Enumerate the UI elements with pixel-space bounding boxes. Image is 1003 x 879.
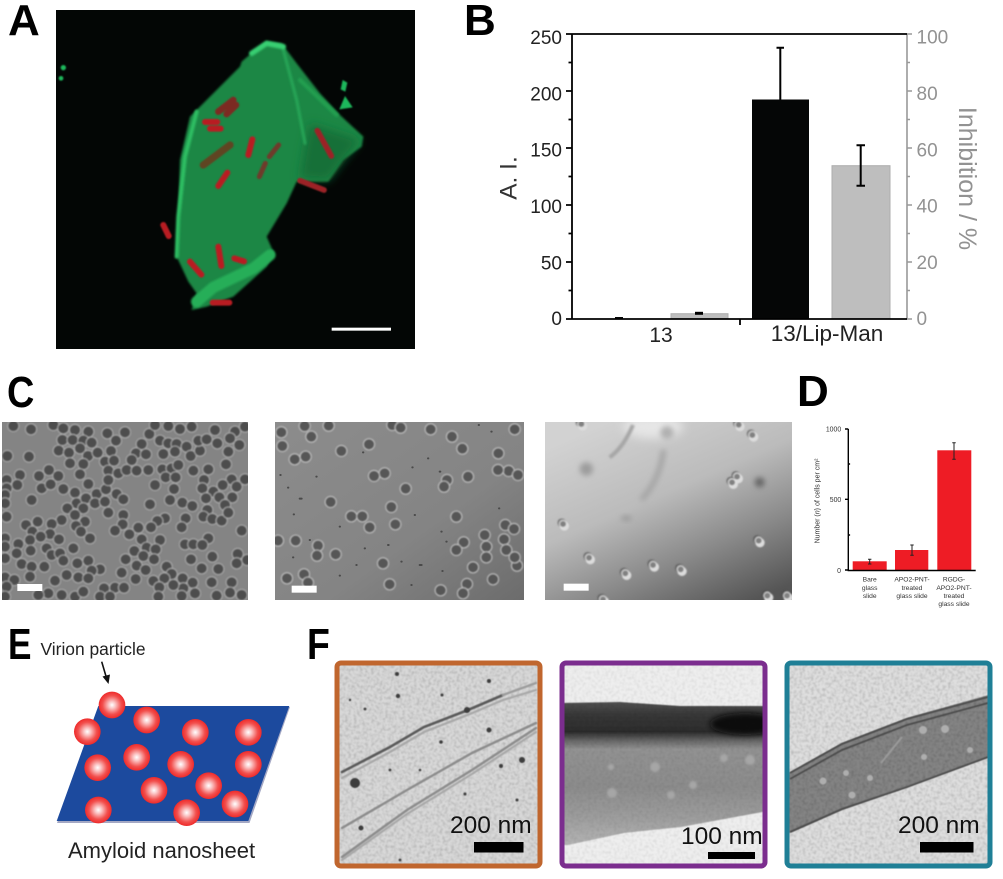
debris specks <box>280 425 499 585</box>
scale text: 200 nm <box>898 812 980 839</box>
panel D: cell count bar chart <box>814 426 976 608</box>
left axis numbers: 100 <box>530 197 562 218</box>
panel F left: fibres TEM, orange frame <box>337 663 540 866</box>
right axis numbers: 60 <box>916 141 938 162</box>
bar labels <box>862 577 972 608</box>
axes <box>845 429 976 570</box>
bar labels: glass <box>862 585 878 592</box>
grey bars <box>671 166 890 319</box>
right axis numbers: 0 <box>916 309 927 330</box>
red bars <box>853 450 971 570</box>
fibres <box>342 683 536 860</box>
category labels: 13 <box>649 324 673 347</box>
left axis numbers: 50 <box>541 253 562 274</box>
axis numbers: 1000 <box>826 426 841 434</box>
virion label: Virion particle <box>40 639 146 659</box>
error bars <box>868 443 956 564</box>
panel label D: D <box>797 367 829 416</box>
frame <box>787 663 990 866</box>
scale bar <box>332 328 391 331</box>
ribbon <box>785 694 992 835</box>
arrow to virion <box>102 662 110 684</box>
category labels: 13/Lip-Man <box>771 321 883 346</box>
bright streak and folds <box>580 415 765 521</box>
bar labels: glass slide <box>938 601 970 608</box>
panel E: virions on nanosheet diagram <box>40 639 290 863</box>
cells <box>557 418 793 606</box>
scale bar <box>17 584 42 591</box>
panel B: bar chart <box>496 27 981 347</box>
right axis numbers: 40 <box>916 196 938 217</box>
left axis title: A. I. <box>496 156 523 200</box>
axis numbers <box>826 426 841 575</box>
left axis numbers: 0 <box>551 309 562 330</box>
axis numbers: 0 <box>837 568 841 575</box>
bar labels: RGDG- <box>943 577 965 584</box>
axes <box>566 34 912 325</box>
panel F right: ribbon TEM, teal frame <box>785 663 992 866</box>
right axis numbers: 100 <box>916 27 948 48</box>
green specks <box>59 65 353 109</box>
category labels <box>649 321 883 347</box>
ribbon edges <box>790 697 988 832</box>
nanosheet label: Amyloid nanosheet <box>68 838 255 863</box>
panel label E: E <box>8 620 31 669</box>
right axis title: Inhibition / % <box>953 107 981 250</box>
axis title: Number (n) of cells per cm² <box>814 458 822 543</box>
bar labels: APO2-PNT- <box>936 585 972 592</box>
panel A: fluorescence micrograph <box>56 10 415 349</box>
bar labels: treated <box>944 593 965 600</box>
left axis numbers: 150 <box>530 141 562 162</box>
right axis numbers: 20 <box>916 253 938 274</box>
error bars <box>695 48 865 313</box>
left axis numbers <box>530 28 562 330</box>
cells <box>0 419 253 602</box>
ribbon <box>560 702 768 845</box>
specks <box>349 672 525 861</box>
bar labels: glass slide <box>896 593 928 600</box>
scale text: 100 nm <box>681 823 763 850</box>
scale bar <box>564 584 589 591</box>
panel C middle: sparser cells micrograph <box>272 419 524 600</box>
panel F middle: ribbon TEM, purple frame <box>560 663 780 866</box>
pale spots <box>607 754 755 799</box>
pale spots <box>820 725 973 798</box>
axis numbers: 500 <box>830 497 841 504</box>
scale text: 200 nm <box>450 812 532 839</box>
left axis numbers: 200 <box>530 85 562 106</box>
bar labels: Bare <box>863 577 877 584</box>
bar labels: treated <box>902 585 923 592</box>
panel C left: dense cells micrograph <box>0 419 253 602</box>
scale bar <box>920 842 974 852</box>
bacteria in red <box>163 100 331 303</box>
panel C right: few cells micrograph <box>545 415 793 606</box>
right axis numbers <box>916 27 948 330</box>
bar labels: slide <box>863 593 877 600</box>
scale bar <box>292 586 317 593</box>
frame <box>337 663 540 866</box>
cells <box>272 419 524 599</box>
panel label F: F <box>307 619 330 669</box>
black bars <box>615 100 809 319</box>
right axis numbers: 80 <box>916 84 938 105</box>
bar labels: APO2-PNT- <box>894 577 930 584</box>
panel label C: C <box>7 367 34 417</box>
nanosheet in green <box>177 42 363 310</box>
scale bar <box>708 852 755 859</box>
virion particles <box>74 692 262 826</box>
scale bar <box>474 842 524 852</box>
frame <box>562 663 765 866</box>
nanosheet <box>57 706 290 823</box>
left axis numbers: 250 <box>530 28 562 49</box>
